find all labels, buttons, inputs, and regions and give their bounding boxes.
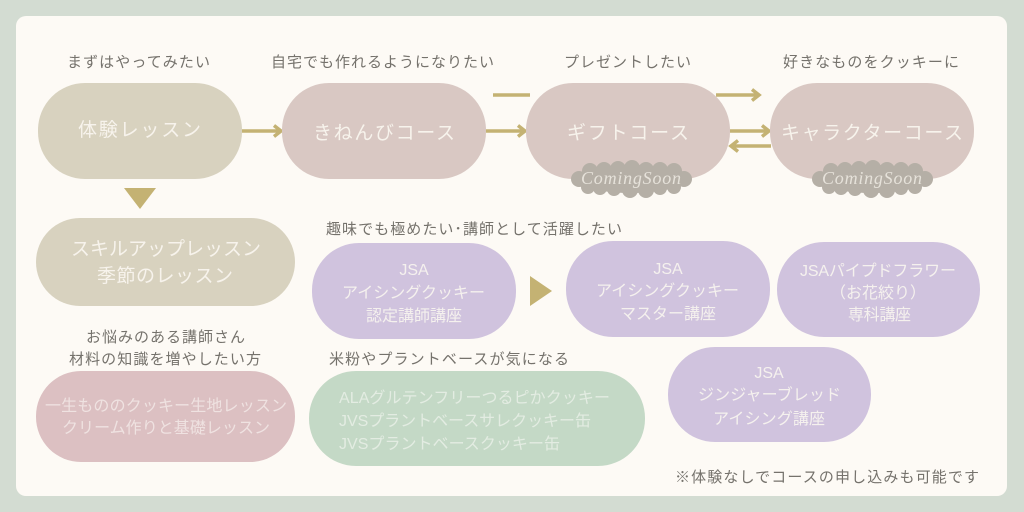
arrow: gift course to character course: [730, 126, 769, 136]
panel: trial lesson: [38, 83, 242, 179]
badge: coming soon gift: [571, 160, 692, 198]
badge: coming soon character: [812, 160, 933, 198]
arrow: trial lesson to kinenbi course: [242, 126, 281, 136]
panel: JSA master: [566, 241, 770, 337]
panel: gluten-free and plant-based: ALAグルテンフリーつるピかクッキー: [339, 389, 610, 407]
panel: skill-up lessons: スキルアップレッスン: [71, 238, 261, 260]
heading: trial: まずはやってみたい: [67, 54, 210, 71]
panel: trial lesson: 体験レッスン: [78, 119, 201, 141]
panel: JSA gingerbread: アイシング講座: [713, 410, 825, 428]
panel: gift course: [526, 83, 730, 179]
panel: character course: キャラクターコース: [781, 122, 963, 144]
panel: JSA piped flower: [777, 242, 980, 337]
panel: JSA gingerbread: ジンジャーブレッド: [698, 385, 841, 404]
heading: gift: プレゼントしたい: [564, 54, 691, 71]
panel: dough lessons: [36, 371, 295, 462]
heading: materials knowledge: 材料の知識を増やしたい方: [69, 351, 261, 368]
arrow: top into gift course: [493, 93, 530, 97]
heading: worried instructors: お悩みのある講師さん: [86, 329, 245, 346]
panel: JSA gingerbread: JSA: [754, 365, 784, 382]
panel: gluten-free and plant-based: JVSプラントベースサレクッキー缶: [339, 412, 591, 430]
panel: dough lessons: 一生もののクッキー生地レッスン: [45, 397, 287, 415]
footnote: ※体験なしでコースの申し込みも可能です: [675, 469, 979, 486]
arrow: character course back to gift course: [731, 140, 771, 152]
arrow: down triangle: [124, 188, 156, 209]
panel: JSA certified instructor: 認定講師講座: [366, 307, 462, 325]
panel: JSA master: JSA: [653, 261, 683, 278]
panel: skill-up lessons: [36, 218, 295, 306]
badge: coming soon gift: ComingSoon: [581, 168, 681, 188]
panel: JSA certified instructor: JSA: [399, 262, 429, 279]
heading: instructor: 趣味でも極めたい･講師として活躍したい: [326, 221, 622, 238]
panel: JSA gingerbread: [668, 347, 871, 442]
panel: kinenbi course: [282, 83, 486, 179]
panel: JSA piped flower: JSAパイプドフラワー: [800, 262, 956, 280]
panel: character course: [770, 83, 974, 179]
panel: JSA piped flower: （お花絞り）: [830, 284, 926, 302]
heading: character: 好きなものをクッキーに: [783, 54, 959, 71]
panel: JSA master: アイシングクッキー: [596, 282, 739, 300]
panel: JSA master: マスター講座: [620, 305, 716, 323]
arrow: gift course to character course, top: [716, 90, 759, 100]
panel: gluten-free and plant-based: JVSプラントベースクッキー缶: [339, 435, 560, 453]
badge: coming soon character: ComingSoon: [822, 168, 922, 188]
panel: JSA certified instructor: [312, 243, 516, 339]
panel: JSA certified instructor: アイシングクッキー: [342, 284, 485, 302]
arrow: right triangle: [530, 276, 552, 306]
heading: rice flour: 米粉やプラントベースが気になる: [329, 351, 569, 368]
heading: home: 自宅でも作れるようになりたい: [271, 54, 494, 71]
panel: kinenbi course: きねんびコース: [313, 122, 455, 144]
panel: gluten-free and plant-based: [309, 371, 645, 466]
panel: skill-up lessons: 季節のレッスン: [97, 265, 233, 287]
panel: dough lessons: クリーム作りと基礎レッスン: [62, 419, 270, 437]
panel: gift course: ギフトコース: [567, 122, 689, 144]
arrow: kinenbi course to gift course: [486, 126, 525, 136]
panel: JSA piped flower: 専科講座: [848, 306, 911, 324]
